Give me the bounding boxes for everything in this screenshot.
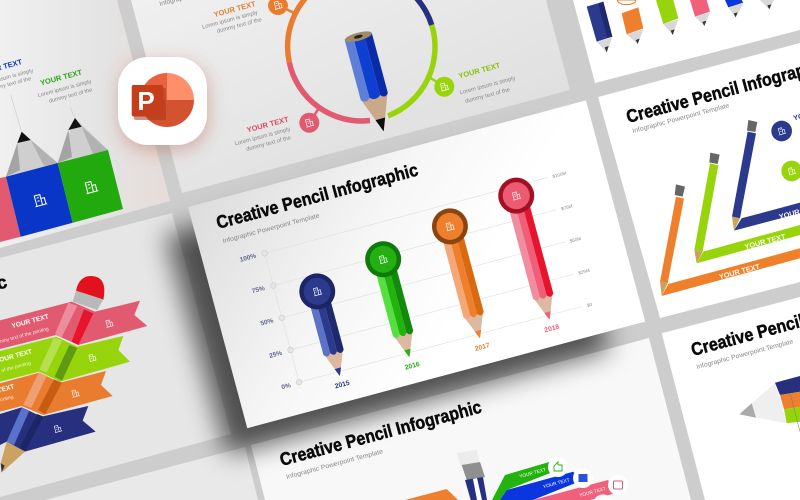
bubble: green [429,77,454,97]
ribbon labels: YOUR TEXT [542,477,570,490]
title: Creative Pencil Infographic [278,397,484,470]
panel: bottom-left slide [45,447,258,500]
panel: top right pencils slide [573,0,800,83]
text: red [234,116,291,151]
ribbon: green [492,462,550,500]
axis right labels: $100M [552,171,567,179]
subtitle: Infographic Powerpoint Template [696,338,794,371]
pencil [457,450,487,500]
text: orange: Lorem ipsum is simply [202,10,259,31]
text: green your text: dummy text of the [48,87,93,105]
pencil 2015 [295,269,357,381]
axis left labels: 25% [269,350,283,360]
ribbon: blue [500,472,583,500]
text: green [458,62,515,103]
badge: green [548,457,568,477]
text: green your text: YOUR TEXT [39,68,83,87]
panel: top centre circular slide [131,0,570,193]
panel: right L-shaped pencils slide [598,43,800,318]
panel: bottom centre slide [251,338,691,500]
bubble: orange [268,0,296,15]
blue pencil head with block [0,95,73,242]
L pencils chart [660,108,800,296]
pencil 2017 [428,204,497,343]
ribbon labels: YOUR TEXT [519,467,547,480]
axis right labels: $25M [578,268,590,276]
panel: bottom right slide [662,287,800,500]
L pencils chart: YOUR TEXT [718,262,761,281]
axis grid [265,177,582,382]
pencil 2018 [494,174,567,324]
ribbon pencil chart: YOUR TEXT [11,313,50,330]
horizontal pencil [739,376,800,432]
text: green: Lorem ipsum is simply [459,76,516,96]
L pencils chart: YOUR TEXT [744,232,787,251]
text: red: dummy text of the [246,135,292,153]
axis right labels [552,171,601,308]
icon: blue pencil [344,31,388,132]
subtitle: Infographic Powerpoint Template [285,448,384,481]
panel: top-left slide [0,0,170,248]
icon: PowerPoint logo: P [137,86,155,116]
text: blue your text [0,59,33,88]
green pencil head with block [58,107,123,223]
badge: blue [573,468,593,488]
panel: left ribbon slide [0,213,231,497]
text: red: Lorem ipsum is simply [234,127,291,147]
axis left labels [239,253,292,393]
axis right labels: $75M [561,204,573,211]
ribbon labels [519,467,607,499]
text: green: YOUR TEXT [457,61,502,80]
panel: centre slide bar chart [188,100,645,428]
badge: partial [594,494,612,500]
axis left labels: 50% [260,317,274,328]
text: orange: dummy text of the [216,17,263,35]
ribbon: pink [533,480,620,500]
ribbon pencil chart [0,276,147,473]
text: red: YOUR TEXT [246,115,290,134]
bubble: red [299,108,319,133]
ring segments [288,0,435,121]
subtitle: Infographic Powerpoint Template [222,212,321,245]
text: green: dummy text of the [465,87,511,105]
ribbon labels: YOUR TEXT [579,486,607,499]
axis left labels: 0% [281,382,292,391]
axis right labels: $50M [569,236,582,244]
text: green your text [38,70,92,102]
year labels [334,324,560,390]
text: green your text: Lorem ipsum is simply [37,79,92,99]
badge: pink [608,475,628,495]
axis left labels: 75% [251,285,266,295]
year labels: 2017 [474,342,491,353]
title: Creative Pencil Infographic [214,160,420,233]
axis right labels: $0 [586,302,593,308]
axis markers [261,250,303,386]
subtitle: Infographic Powerpoint Template [632,102,730,135]
bottom slide contents [278,397,628,500]
icon: PowerPoint logo [118,57,208,150]
text: orange [202,1,262,33]
pencil 2016 [361,237,427,362]
year labels: 2018 [544,324,560,334]
year labels: 2016 [404,361,421,372]
shadow: centre slide [150,210,624,470]
year labels: 2015 [334,380,351,390]
axis left labels: 100% [239,253,257,264]
pencils row [587,0,774,52]
ribbon: orange [405,489,458,500]
